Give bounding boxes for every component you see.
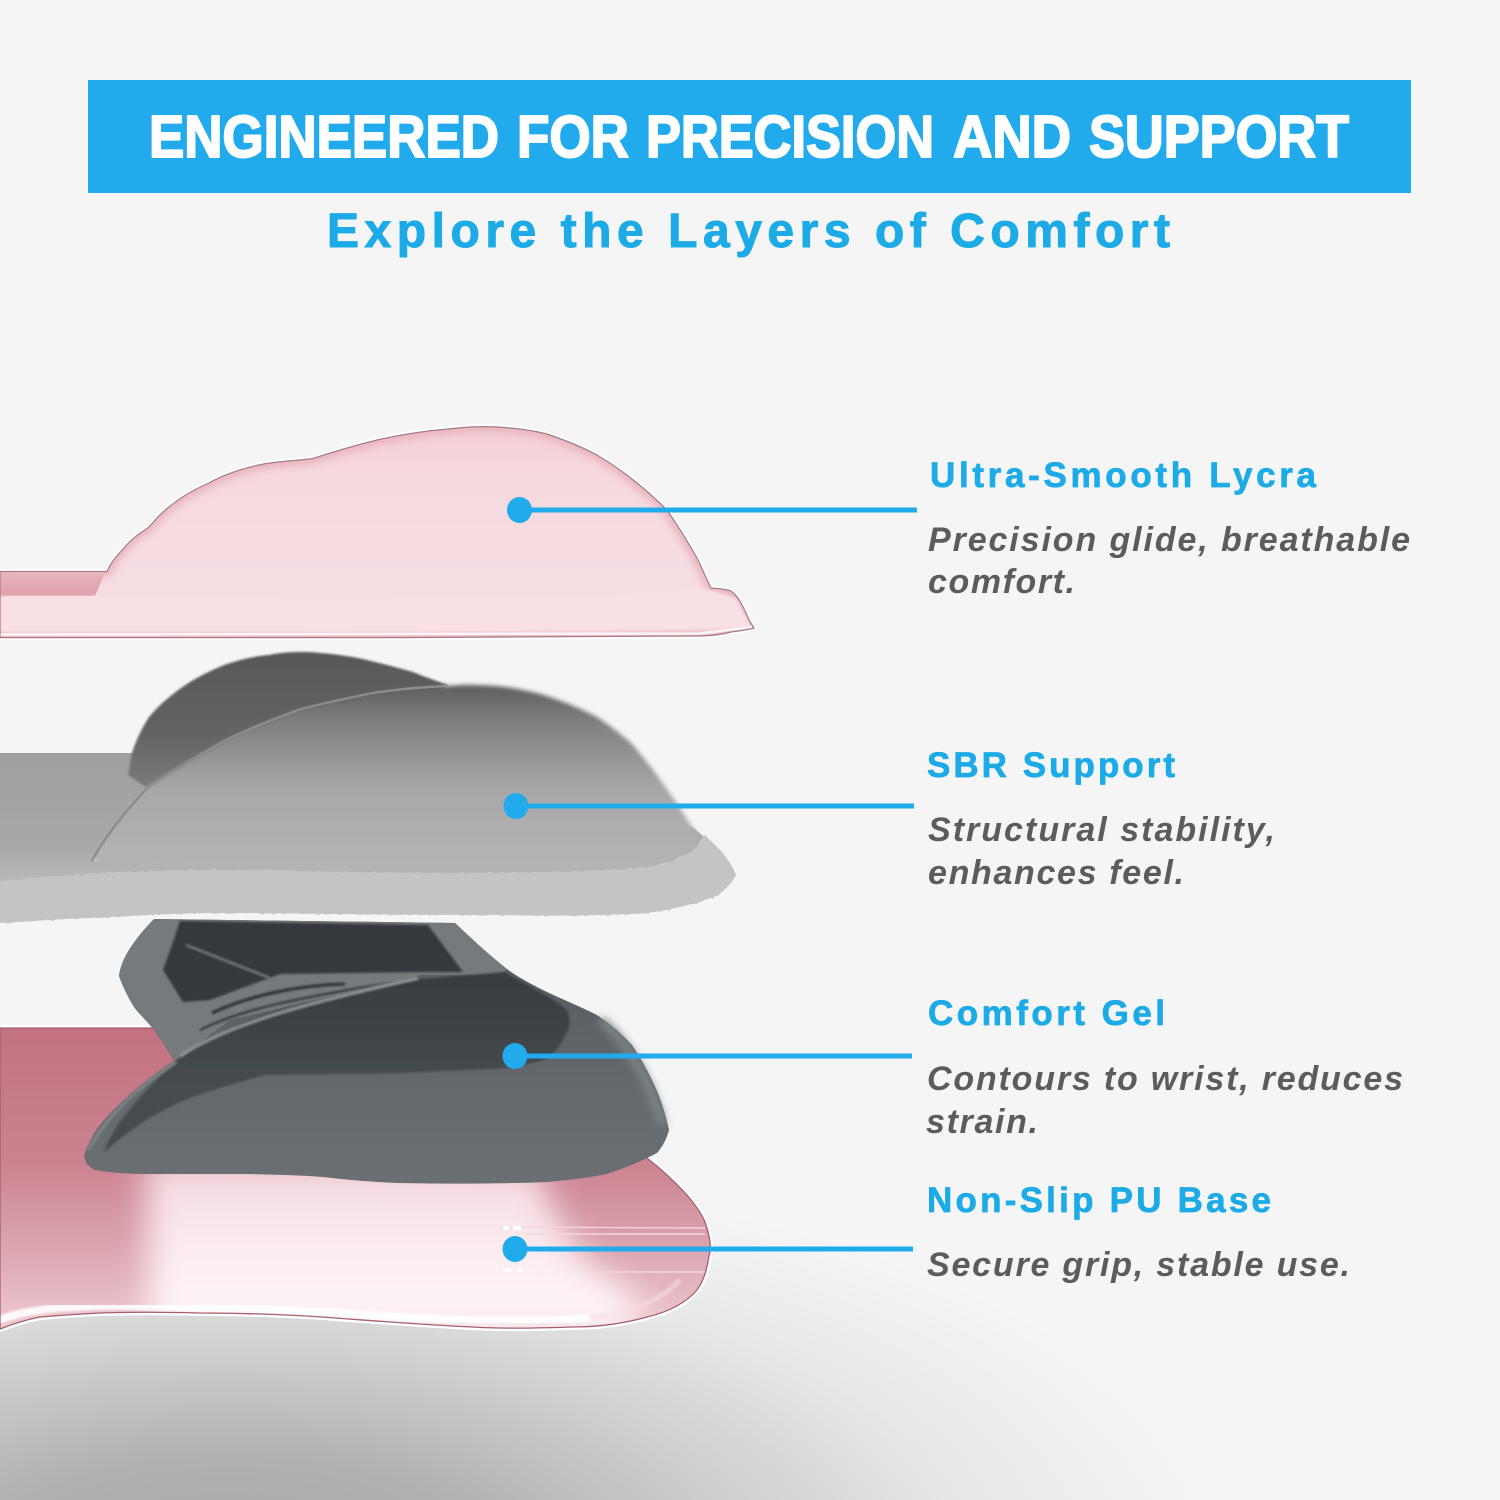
label heading: Non-Slip PU Base xyxy=(927,1181,1271,1220)
gel upper grey shell xyxy=(119,919,507,1061)
layer: pink Lycra top xyxy=(0,427,754,638)
title: FOR xyxy=(517,104,629,170)
title: PRECISION xyxy=(646,104,934,170)
gel dark body panel xyxy=(104,972,570,1152)
gel dark window xyxy=(163,921,463,1002)
pad slab xyxy=(0,753,736,923)
label description: comfort. xyxy=(928,563,1075,601)
callout: SBR Support xyxy=(504,746,1275,892)
label heading: Comfort Gel xyxy=(928,994,1165,1033)
callout: Comfort Gel xyxy=(502,994,1403,1141)
label description: Precision glide, breathable xyxy=(928,521,1410,559)
gel streak highlights xyxy=(88,945,418,1150)
title: SUPPORT xyxy=(1089,104,1349,170)
layer: grey SBR foam xyxy=(0,652,736,923)
label description: strain. xyxy=(926,1103,1038,1141)
pointer dot and line xyxy=(507,497,917,523)
pointer dot and line xyxy=(502,1043,912,1069)
subtitle: Explore the Layers of Comfort xyxy=(327,205,1170,258)
label description: Structural stability, xyxy=(928,811,1275,849)
layer: dark comfort gel xyxy=(84,919,669,1184)
header banner xyxy=(88,80,1411,193)
label description: Secure grip, stable use. xyxy=(927,1246,1350,1284)
callout: Ultra-Smooth Lycra xyxy=(507,456,1410,601)
label description: Contours to wrist, reduces xyxy=(927,1060,1403,1098)
label heading: Ultra-Smooth Lycra xyxy=(930,456,1317,495)
label description xyxy=(928,811,1275,892)
back hump xyxy=(128,652,448,790)
label heading: SBR Support xyxy=(927,746,1175,785)
label description xyxy=(928,521,1410,601)
pointer dot and line xyxy=(504,793,914,819)
layer: pink PU base xyxy=(0,1028,710,1335)
pointer dot and line xyxy=(502,1236,913,1262)
label description: enhances feel. xyxy=(928,854,1184,892)
rim xyxy=(0,835,736,923)
title: AND xyxy=(953,104,1071,170)
front hump xyxy=(92,685,700,872)
callout: Non-Slip PU Base xyxy=(502,1181,1350,1284)
gel right edge highlight xyxy=(600,1020,662,1125)
title: ENGINEERED xyxy=(149,104,499,170)
label description xyxy=(926,1060,1403,1141)
